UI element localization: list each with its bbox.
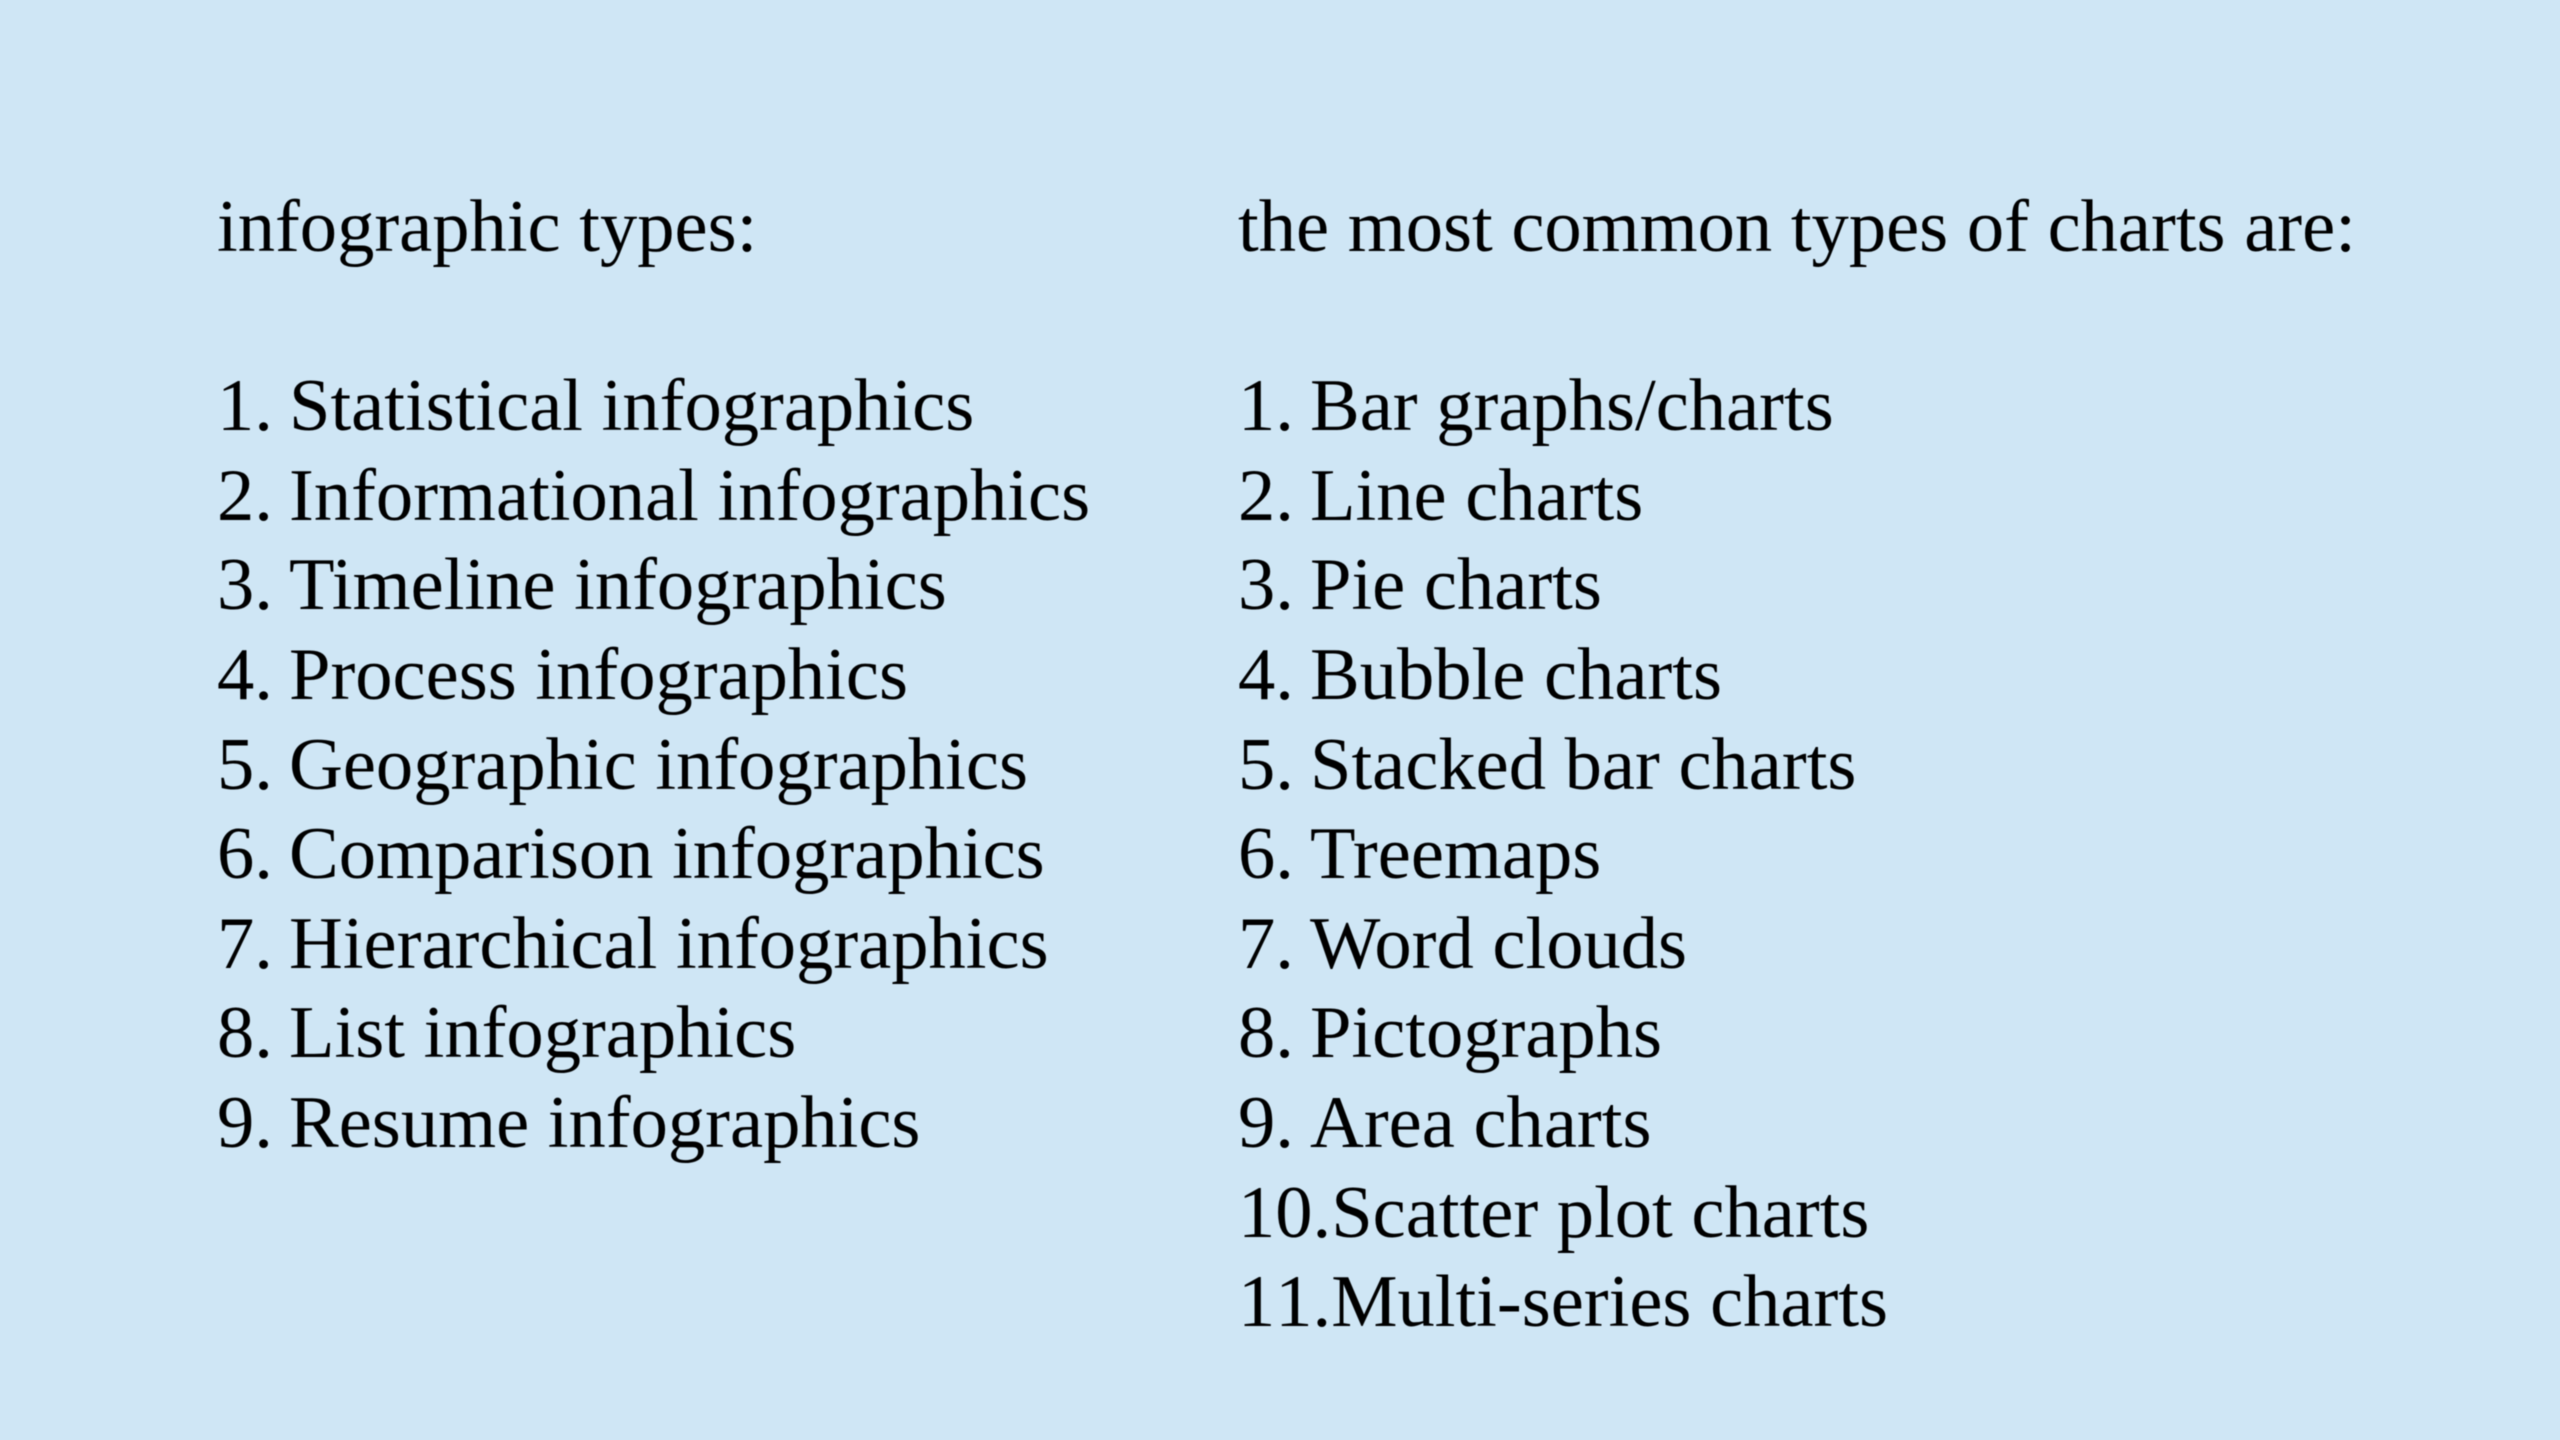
list: infographic types: 1. — [217, 365, 273, 447]
list: chart types: 3. — [1238, 544, 1294, 626]
list: chart types: 9. — [1238, 1082, 1294, 1164]
list: chart types: Multi-series charts — [1331, 1261, 1888, 1343]
list: chart types: 5. — [1238, 724, 1294, 806]
list: infographic types: Comparison infographics — [289, 813, 1045, 895]
list: infographic types: Geographic infographics — [289, 724, 1028, 806]
heading: infographic types: infographic types: — [217, 186, 757, 268]
list: chart types: 8. — [1238, 992, 1294, 1074]
list: infographic types: Statistical infographics — [289, 365, 974, 447]
list: chart types: 6. — [1238, 813, 1294, 895]
list: chart types: Stacked bar charts — [1310, 724, 1856, 806]
list: infographic types: 3. — [217, 544, 273, 626]
list: infographic types: 4. — [217, 634, 273, 716]
list: infographic types: Informational infographics — [289, 455, 1090, 537]
list: chart types: 7. — [1238, 903, 1294, 985]
list: chart types: 11. — [1238, 1261, 1331, 1343]
list: chart types: Scatter plot charts — [1331, 1172, 1869, 1254]
list: chart types: 4. — [1238, 634, 1294, 716]
list: infographic types: 6. — [217, 813, 273, 895]
list: infographic types: 5. — [217, 724, 273, 806]
list: chart types: Word clouds — [1310, 903, 1687, 985]
list: infographic types: Resume infographics — [289, 1082, 920, 1164]
list: chart types: Bar graphs/charts — [1310, 365, 1834, 447]
list: chart types — [1238, 365, 1888, 1343]
list: infographic types: 9. — [217, 1082, 273, 1164]
list: chart types: Treemaps — [1310, 813, 1601, 895]
panel: most common chart types — [1238, 186, 2356, 1343]
list: infographic types: 7. — [217, 903, 273, 985]
list: chart types: Area charts — [1310, 1082, 1651, 1164]
list: chart types: 2. — [1238, 455, 1294, 537]
panel: infographic types — [217, 186, 1090, 1164]
list: infographic types: 2. — [217, 455, 273, 537]
list: chart types: Line charts — [1310, 455, 1643, 537]
list: infographic types — [217, 365, 1090, 1164]
list: chart types: Pie charts — [1310, 544, 1602, 626]
list: chart types: Pictographs — [1310, 992, 1662, 1074]
heading: most common chart types: the most common types of charts are: — [1238, 186, 2356, 268]
list: chart types: 1. — [1238, 365, 1294, 447]
list: chart types: 10. — [1238, 1172, 1331, 1254]
list: infographic types: List infographics — [289, 992, 796, 1074]
list: infographic types: Timeline infographics — [289, 544, 947, 626]
list: infographic types: Process infographics — [289, 634, 908, 716]
list: infographic types: Hierarchical infographics — [289, 903, 1049, 985]
list: chart types: Bubble charts — [1310, 634, 1722, 716]
list: infographic types: 8. — [217, 992, 273, 1074]
